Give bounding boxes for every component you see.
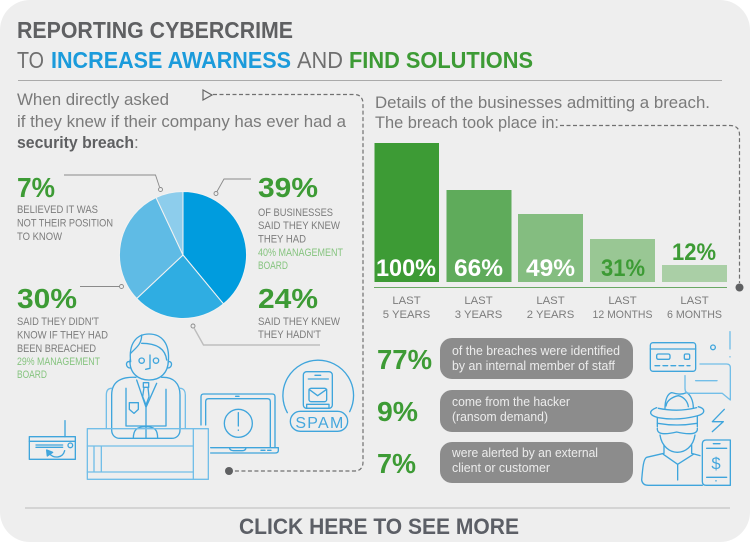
right heading text (375, 93, 710, 132)
stat row: 77%: by an internal member of staff (452, 358, 615, 373)
title: REPORTING CYBERCRIME (17, 17, 293, 43)
dashed arrow connector: left panel (203, 90, 363, 475)
callout leader lines (64, 175, 320, 345)
bar chart: 12 MONTHS (592, 309, 653, 321)
stat row: 7%: were alerted by an external (451, 445, 598, 460)
bar chart: 100% (376, 255, 436, 282)
title: FIND SOLUTIONS (349, 47, 533, 73)
stat: 7%: BELIEVED IT WAS (17, 204, 98, 216)
title (17, 17, 533, 73)
title: TO (17, 47, 44, 73)
stat: 39% (258, 172, 343, 272)
stat: 39%: THEY HAD (258, 234, 306, 246)
bar chart: 66% (454, 255, 503, 282)
stat: 30%: 29% MANAGEMENT (17, 356, 100, 368)
stat row: 7%: client or customer (452, 460, 551, 475)
stat: 24%: 24% (258, 283, 318, 314)
right heading text: Details of the businesses admitting a breach. (375, 93, 710, 112)
left heading text: When directly asked (17, 90, 169, 109)
stat: 39%: OF BUSINESSES (258, 207, 333, 219)
left heading text: : (134, 133, 139, 152)
stat row: 9%: 9% (377, 396, 418, 427)
stat row: 77%: of the breaches were identified (452, 343, 620, 358)
stat row: 77%: 77% (377, 344, 432, 375)
left heading text: if they knew if their company has ever had a (17, 112, 347, 131)
stat: 24% (258, 283, 340, 341)
stat: 30%: BOARD (17, 369, 47, 381)
call to action: CLICK HERE TO SEE MORE (239, 514, 519, 539)
stat: 30%: KNOW IF THEY HAD (17, 330, 108, 342)
stat: 39%: 40% MANAGEMENT (258, 247, 343, 259)
icon: laptop with alert (201, 394, 278, 453)
stat: 7%: TO KNOW (17, 231, 62, 243)
bar chart: 6 MONTHS (667, 309, 722, 321)
icon: spam phone: SPAM (295, 415, 343, 432)
left heading text (17, 90, 347, 152)
bar chart: LAST (536, 295, 565, 307)
pie chart (119, 191, 246, 319)
stat: 24%: SAID THEY KNEW (258, 316, 340, 328)
stat row: 7% (377, 442, 633, 483)
stat: 39%: SAID THEY KNEW (258, 220, 340, 232)
stat: 7%: 7% (17, 172, 55, 203)
bar chart: 12% (672, 239, 716, 266)
stat: 24%: THEY HADN'T (258, 329, 321, 341)
bar chart (374, 143, 727, 321)
stat: 30%: SAID THEY DIDN'T (17, 316, 99, 328)
icon: hacker with card, chat bubble and phone (642, 332, 730, 485)
bar chart: 2 YEARS (527, 309, 575, 321)
bar chart: LAST (608, 295, 637, 307)
icon: spam phone (283, 360, 354, 432)
stat: 30%: BEEN BREACHED (17, 343, 96, 355)
bar chart: 49% (526, 255, 575, 282)
icon: businessman at desk (87, 334, 208, 479)
title: AND (297, 47, 343, 73)
stat row: 9% (377, 390, 633, 432)
bar chart: 5 YEARS (383, 309, 431, 321)
stat row: 77% (377, 338, 633, 379)
stat: 7% (17, 172, 113, 243)
stat: 30%: 30% (17, 283, 77, 314)
right heading text: The breach took place in: (375, 113, 559, 132)
stat: 30% (17, 283, 108, 381)
stat: 39%: 39% (258, 172, 318, 203)
left heading text: security breach (17, 133, 134, 152)
icon: router (29, 421, 75, 459)
stat: 7%: NOT THEIR POSITION (17, 218, 113, 230)
bar chart: LAST (464, 295, 493, 307)
icon: hacker with card, chat bubble and phone: $ (711, 454, 721, 473)
bar chart: LAST (680, 295, 709, 307)
bar chart: 31% (601, 255, 645, 282)
dashed connector: right panel (560, 126, 744, 292)
stat row: 7%: 7% (377, 448, 416, 479)
title: INCREASE AWARNESS (51, 47, 291, 73)
stat: 39%: BOARD (258, 260, 288, 272)
bar chart: LAST (392, 295, 421, 307)
stat row: 9%: come from the hacker (452, 394, 571, 409)
bar chart: 3 YEARS (455, 309, 503, 321)
stat row: 9%: (ransom demand) (452, 409, 548, 424)
